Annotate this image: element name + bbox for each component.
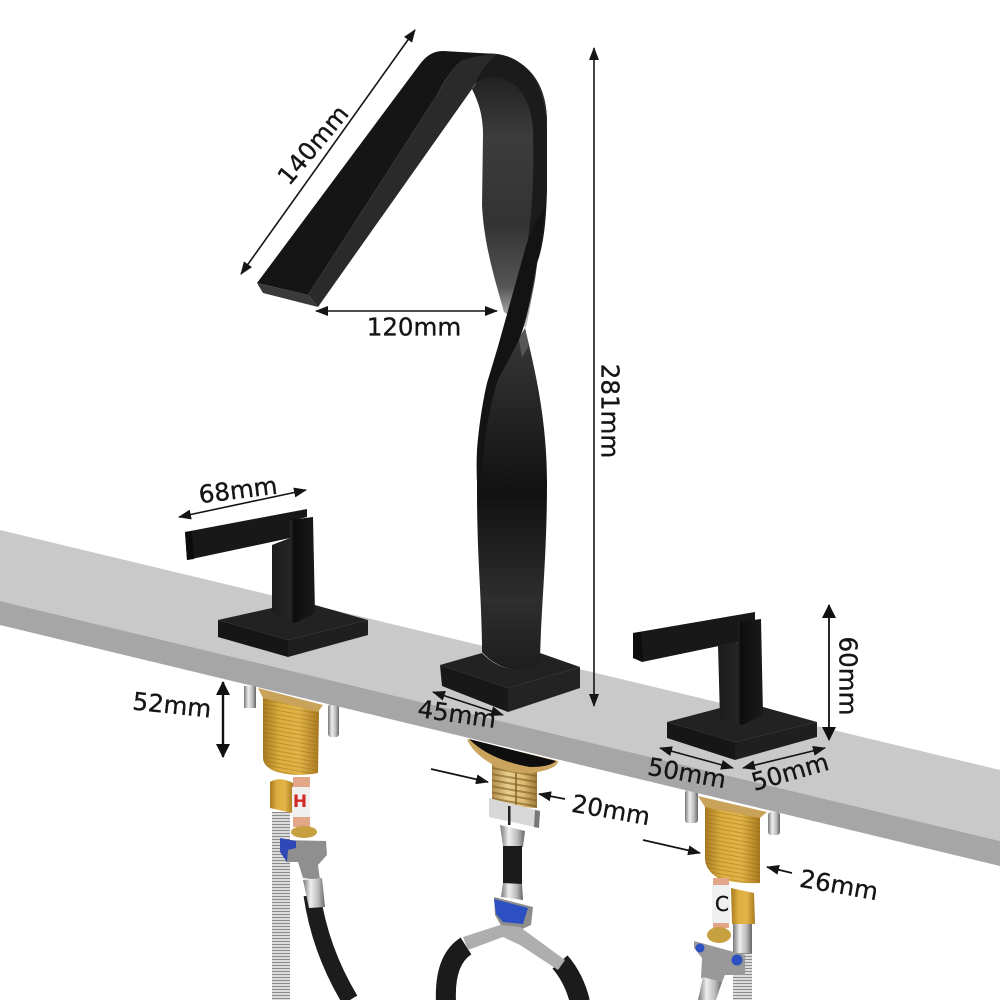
silver hex nut [489,798,540,828]
dimension: 20mm shank [431,769,652,831]
blue clip [494,897,533,930]
mounting screws [244,686,339,737]
spout side face [308,54,497,307]
twist sheen [519,328,529,358]
front crossing strand [477,205,545,510]
lower ferrule [501,883,523,900]
dimension: 60mm handle height: 60mm [834,637,862,715]
black hose [303,878,350,1000]
nozzle end [257,283,318,307]
silver T arms [463,925,565,970]
ribbon inner panel [472,54,547,328]
hot label H [292,777,310,827]
dimension: 45mm base: 45mm [416,694,498,734]
outer curve rim [455,54,547,263]
threaded brass shank [698,796,767,883]
black hose segment [503,846,522,884]
dimension: 140mm spout length [241,30,415,274]
dimension: 68mm lever: 68mm [197,471,279,509]
left hot water fitting [244,686,350,1000]
dimension: 50mm base right: 50mm [748,747,832,797]
hot label H: H [293,792,307,812]
mounting screws [685,790,780,835]
spout top face [257,51,497,295]
dimension: 26mm shank [643,840,880,906]
brass connector [731,888,755,924]
black flange [467,739,558,773]
cold label C [712,878,730,928]
spout faucet [257,51,580,712]
dimension: 26mm shank: 26mm [798,864,880,906]
left handle [185,509,368,657]
base plate [218,605,368,657]
lever [185,509,307,560]
dimension: 52mm shank [131,682,223,757]
dimension: 120mm reach: 120mm [367,312,461,342]
dimension: 281mm height: 281mm [596,364,624,458]
right cold water fitting [685,790,780,1000]
dimension: 20mm shank: 20mm [570,789,652,831]
braided hose [272,812,290,1000]
column [272,517,315,623]
right handle [633,612,817,760]
lever [633,612,755,662]
brass washer [291,826,317,838]
countertop [0,530,1000,866]
T fitting with blue clips [694,941,745,982]
dimension: 52mm shank: 52mm [131,686,213,724]
looped black hoses [446,946,580,1000]
base plate [667,707,817,760]
top surface [0,530,1000,841]
base plate [440,653,580,712]
T fitting with blue clip [280,838,327,880]
threaded shank [492,760,537,808]
silver pipe and braided hose [733,924,752,1000]
dimension: 68mm lever [179,471,306,517]
lower twisted body [477,328,547,670]
centre fitting [446,739,580,1000]
dimension: 60mm handle height [829,605,862,740]
front edge [0,601,1000,866]
silver ferrule [698,977,722,1000]
hose ferrule [500,825,525,847]
dimension: 140mm spout length: 140mm [272,99,354,191]
brass connector [270,779,293,813]
column [718,619,763,725]
dimension: 50mm base left: 50mm [646,752,728,794]
threaded brass shank [258,688,323,775]
brass washer [707,927,731,943]
cold label C: C [715,892,729,916]
